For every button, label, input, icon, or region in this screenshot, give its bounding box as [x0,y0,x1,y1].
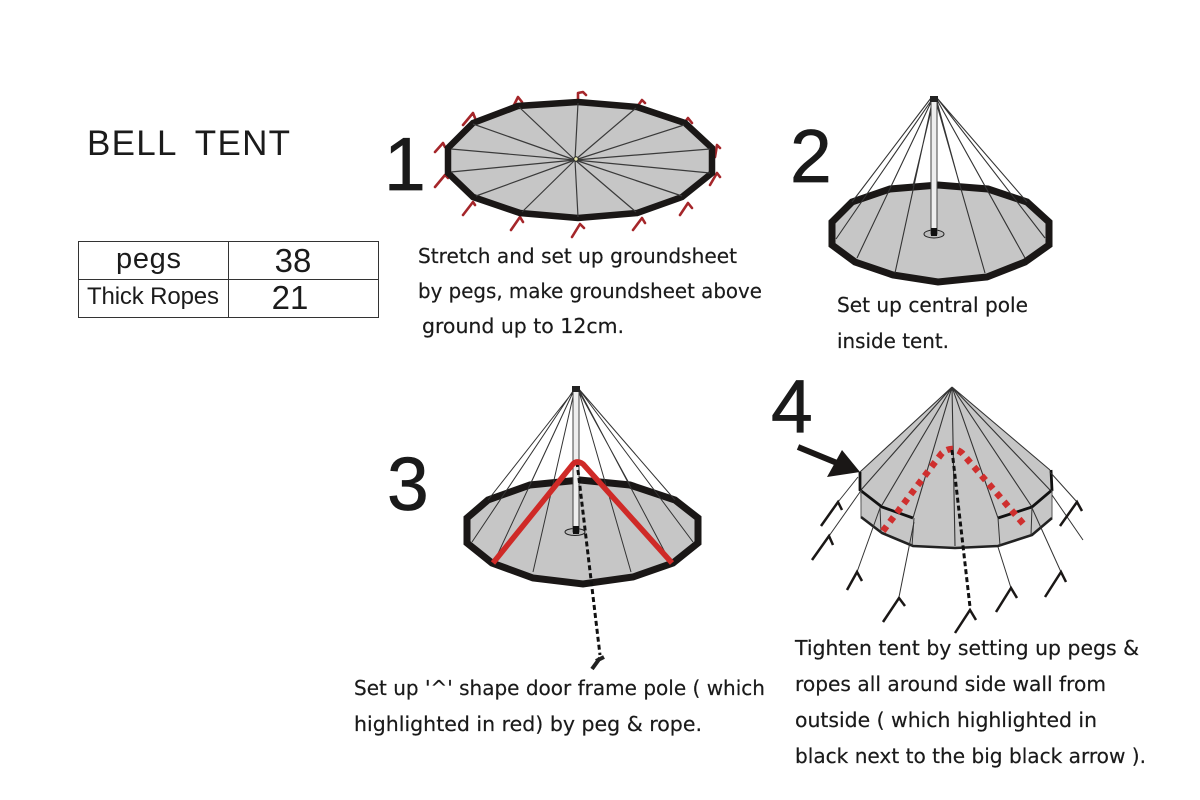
step 4 number: 4 [771,364,813,448]
step 2 instructions: Set up central pole [837,293,1028,317]
guy ropes [829,472,1083,597]
table value: thick ropes: 21 [272,279,308,316]
pole base [924,230,944,238]
table label: pegs: pegs [116,243,181,275]
step 4 arrow [798,447,860,477]
tent body [860,387,1052,548]
central pole [573,388,579,532]
groundsheet [467,480,698,584]
pole base [565,528,585,536]
pegs [812,502,1082,633]
pegs around groundsheet [435,92,720,237]
peg [592,657,604,669]
step 1 instructions [418,244,762,338]
canopy ropes [472,388,693,572]
step 4 diagram: finished tent [812,387,1083,633]
table: parts count [78,241,379,318]
tent hem [861,517,1052,548]
step 4 instructions [794,636,1146,768]
seams [451,103,710,217]
step 4 instructions: Tighten tent by setting up pegs & [794,636,1139,660]
centre point [574,157,578,161]
title: BELL TENT [87,124,290,163]
dashed door rope [952,450,970,607]
step 3 number: 3 [387,442,429,526]
step 1 diagram: pegged groundsheet [435,92,720,237]
groundsheet [448,102,712,218]
step 2 number: 2 [790,114,832,198]
door frame pole highlighted in red [493,462,672,563]
door frame highlighted in red dots [883,449,1026,531]
step 1 number: 1 [384,122,426,206]
step 1 instructions: Stretch and set up groundsheet [418,244,737,268]
canopy ropes [836,98,1045,273]
step 1 instructions: ground up to 12cm. [422,314,624,338]
wall seams [880,507,1032,546]
step 4 instructions: ropes all around side wall from [795,672,1106,696]
step 3 instructions [354,676,765,736]
step 3 instructions: Set up '^' shape door frame pole ( which [354,676,765,700]
table value: pegs: 38 [275,242,311,279]
step 3 instructions: highlighted in red) by peg & rope. [354,712,702,736]
roof seams [860,387,1050,546]
step 4 instructions: black next to the big black arrow ). [795,744,1146,768]
groundsheet [832,185,1049,282]
step 1 instructions: by pegs, make groundsheet above [418,279,762,303]
central pole [931,98,937,234]
table label: thick ropes: Thick Ropes [87,283,219,310]
wall outline [860,470,1052,518]
step 2 instructions: inside tent. [837,329,949,353]
step 3 diagram: door frame pole [467,386,698,669]
dashed rope [577,462,600,655]
step 2 instructions [837,293,1028,353]
step 4 instructions: outside ( which highlighted in [795,708,1097,732]
step 2 diagram: central pole [832,96,1049,282]
